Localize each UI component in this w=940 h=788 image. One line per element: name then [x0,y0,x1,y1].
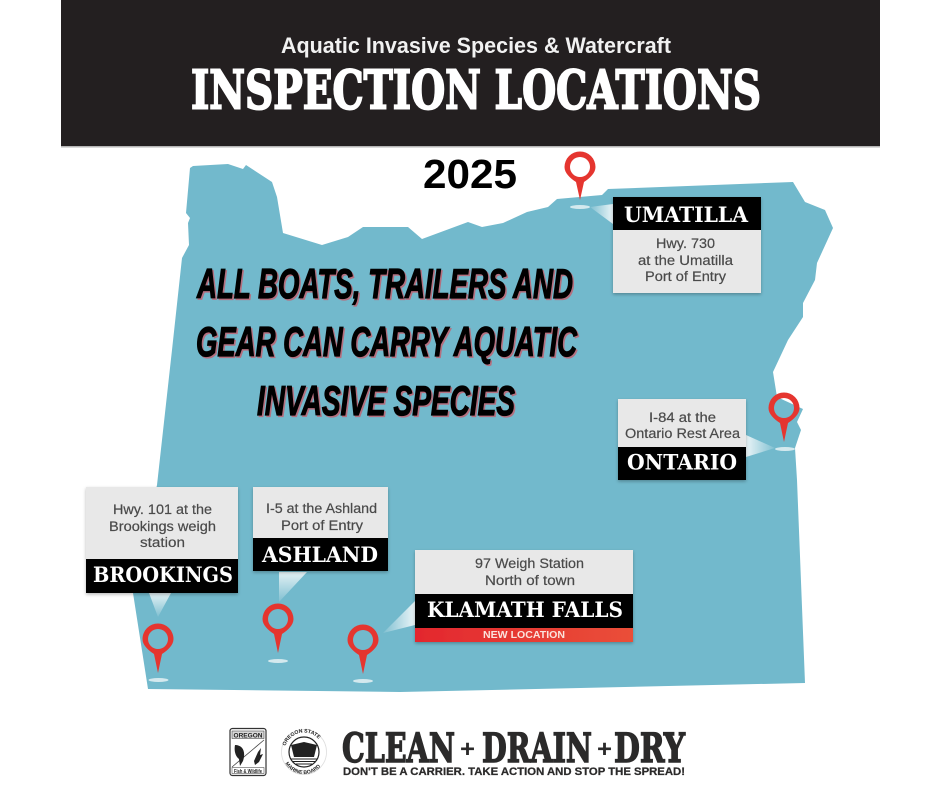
logo: Oregon State Marine Board: MARINE BOARD [285,762,320,774]
logo: Oregon Fish and Wildlife: OREGON [234,732,263,739]
location: Umatilla: UMATILLA [624,203,748,228]
campaign slogan: clean drain dry: DRAIN [482,725,592,772]
location: Brookings: Hwy. 101 at the [113,502,212,517]
location: Umatilla: Port of Entry [645,269,726,284]
new location tag: NEW LOCATION [483,629,565,641]
location: Brookings: BROOKINGS [93,563,233,588]
map of Oregon [133,164,833,692]
campaign slogan: clean drain dry: + [597,736,612,763]
location: Brookings [86,487,238,682]
location: Ashland: Port of Entry [281,518,363,533]
location: Ontario [618,392,800,480]
location: Umatilla [564,151,761,293]
location: Ashland [253,487,388,663]
campaign slogan: clean drain dry: DRY [614,725,685,772]
header banner [61,0,880,148]
location: Ontario: ONTARIO [627,450,737,476]
location: Brookings: Brookings weigh [109,519,216,534]
location: Umatilla: Hwy. 730 [656,236,715,251]
location: Ashland: I-5 at the Ashland [266,501,377,516]
logo: Oregon Fish and Wildlife: Fish & Wildlife [234,769,262,775]
location: Klamath Falls [348,550,633,683]
campaign tagline: DON'T BE A CARRIER. TAKE ACTION AND STOP THE SPREAD! [343,766,685,778]
header subtitle: Aquatic Invasive Species & Watercraft [281,33,672,58]
location: Klamath Falls: North of town [485,573,575,588]
campaign slogan: clean drain dry: CLEAN [342,725,455,772]
location: Ontario: I-84 at the [649,410,716,425]
location: Ashland: ASHLAND [261,543,378,568]
logo: Oregon Fish and Wildlife [230,728,266,776]
campaign slogan: clean drain dry: + [460,736,475,763]
location: Brookings: station [140,535,185,550]
slogan: INVASIVE SPECIES [257,377,515,424]
logo: Oregon State Marine Board [281,728,327,775]
slogan: GEAR CAN CARRY AQUATIC [196,318,577,366]
year: 2025 [423,151,517,197]
location: Umatilla: at the Umatilla [638,253,734,268]
slogan: INVASIVE SPECIES [258,378,516,426]
slogan [196,260,579,426]
slogan: GEAR CAN CARRY AQUATIC [198,320,579,368]
logo: Oregon State Marine Board: OREGON STATE [282,728,321,746]
location: Klamath Falls: KLAMATH FALLS [427,598,623,623]
campaign slogan: clean drain dry [342,725,685,778]
location: Klamath Falls: 97 Weigh Station [475,556,584,571]
slogan: ALL BOATS, TRAILERS AND [198,262,575,308]
location: Ontario: Ontario Rest Area [625,426,741,441]
slogan: ALL BOATS, TRAILERS AND [196,260,573,307]
